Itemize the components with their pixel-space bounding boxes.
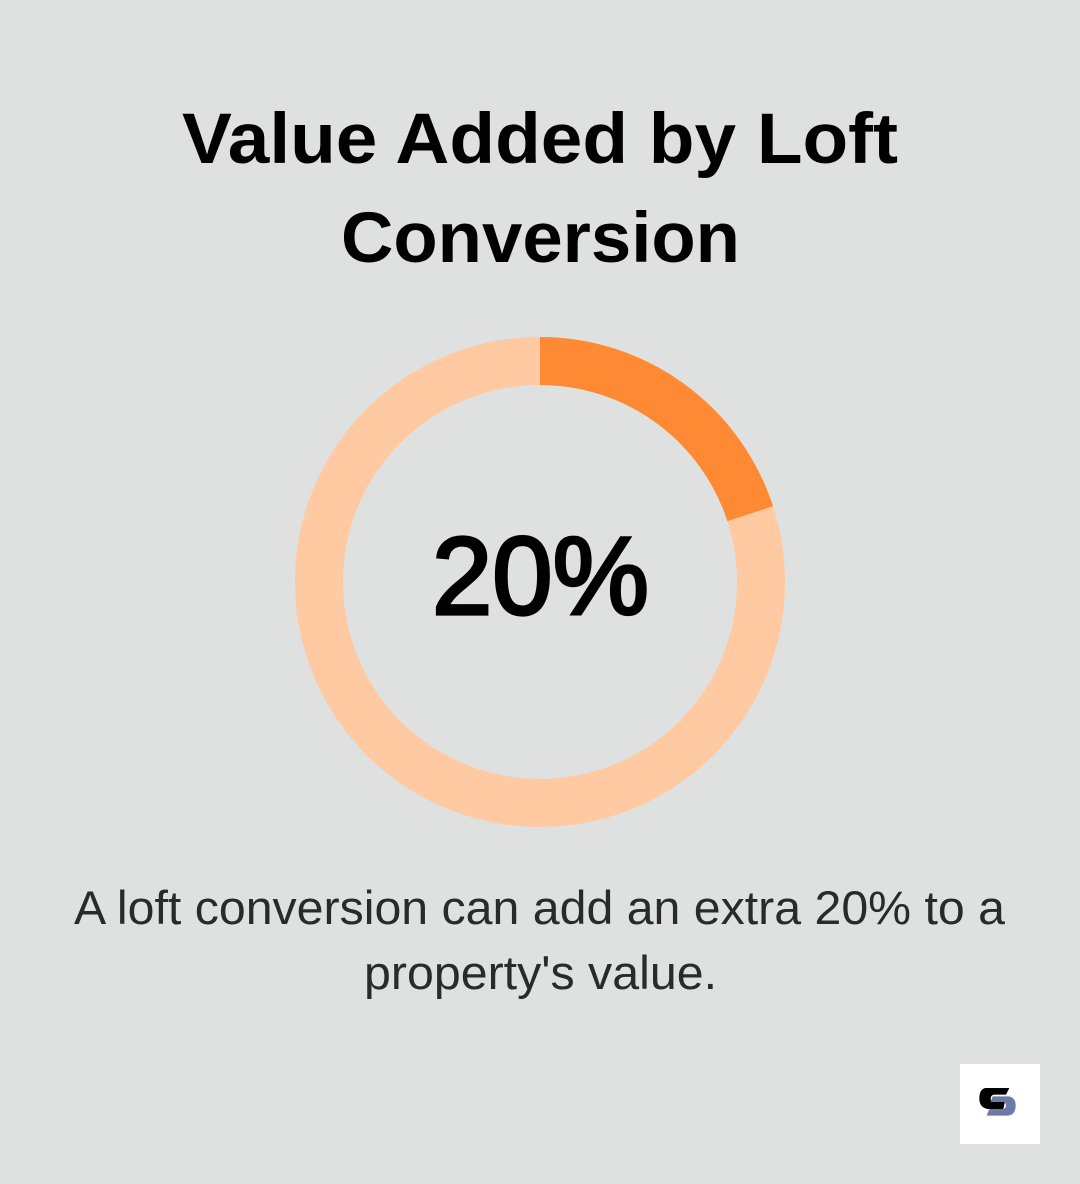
donut centre value: 20% <box>432 515 649 638</box>
description text <box>74 881 1006 999</box>
title: Value Added by Loft <box>182 100 898 179</box>
title: Conversion <box>341 199 740 278</box>
description text: A loft conversion can add an extra 20% to a <box>74 881 1006 934</box>
logo badge <box>960 1064 1040 1144</box>
donut chart: 20% <box>319 361 761 803</box>
description text: property's value. <box>364 946 717 999</box>
title <box>182 100 898 278</box>
